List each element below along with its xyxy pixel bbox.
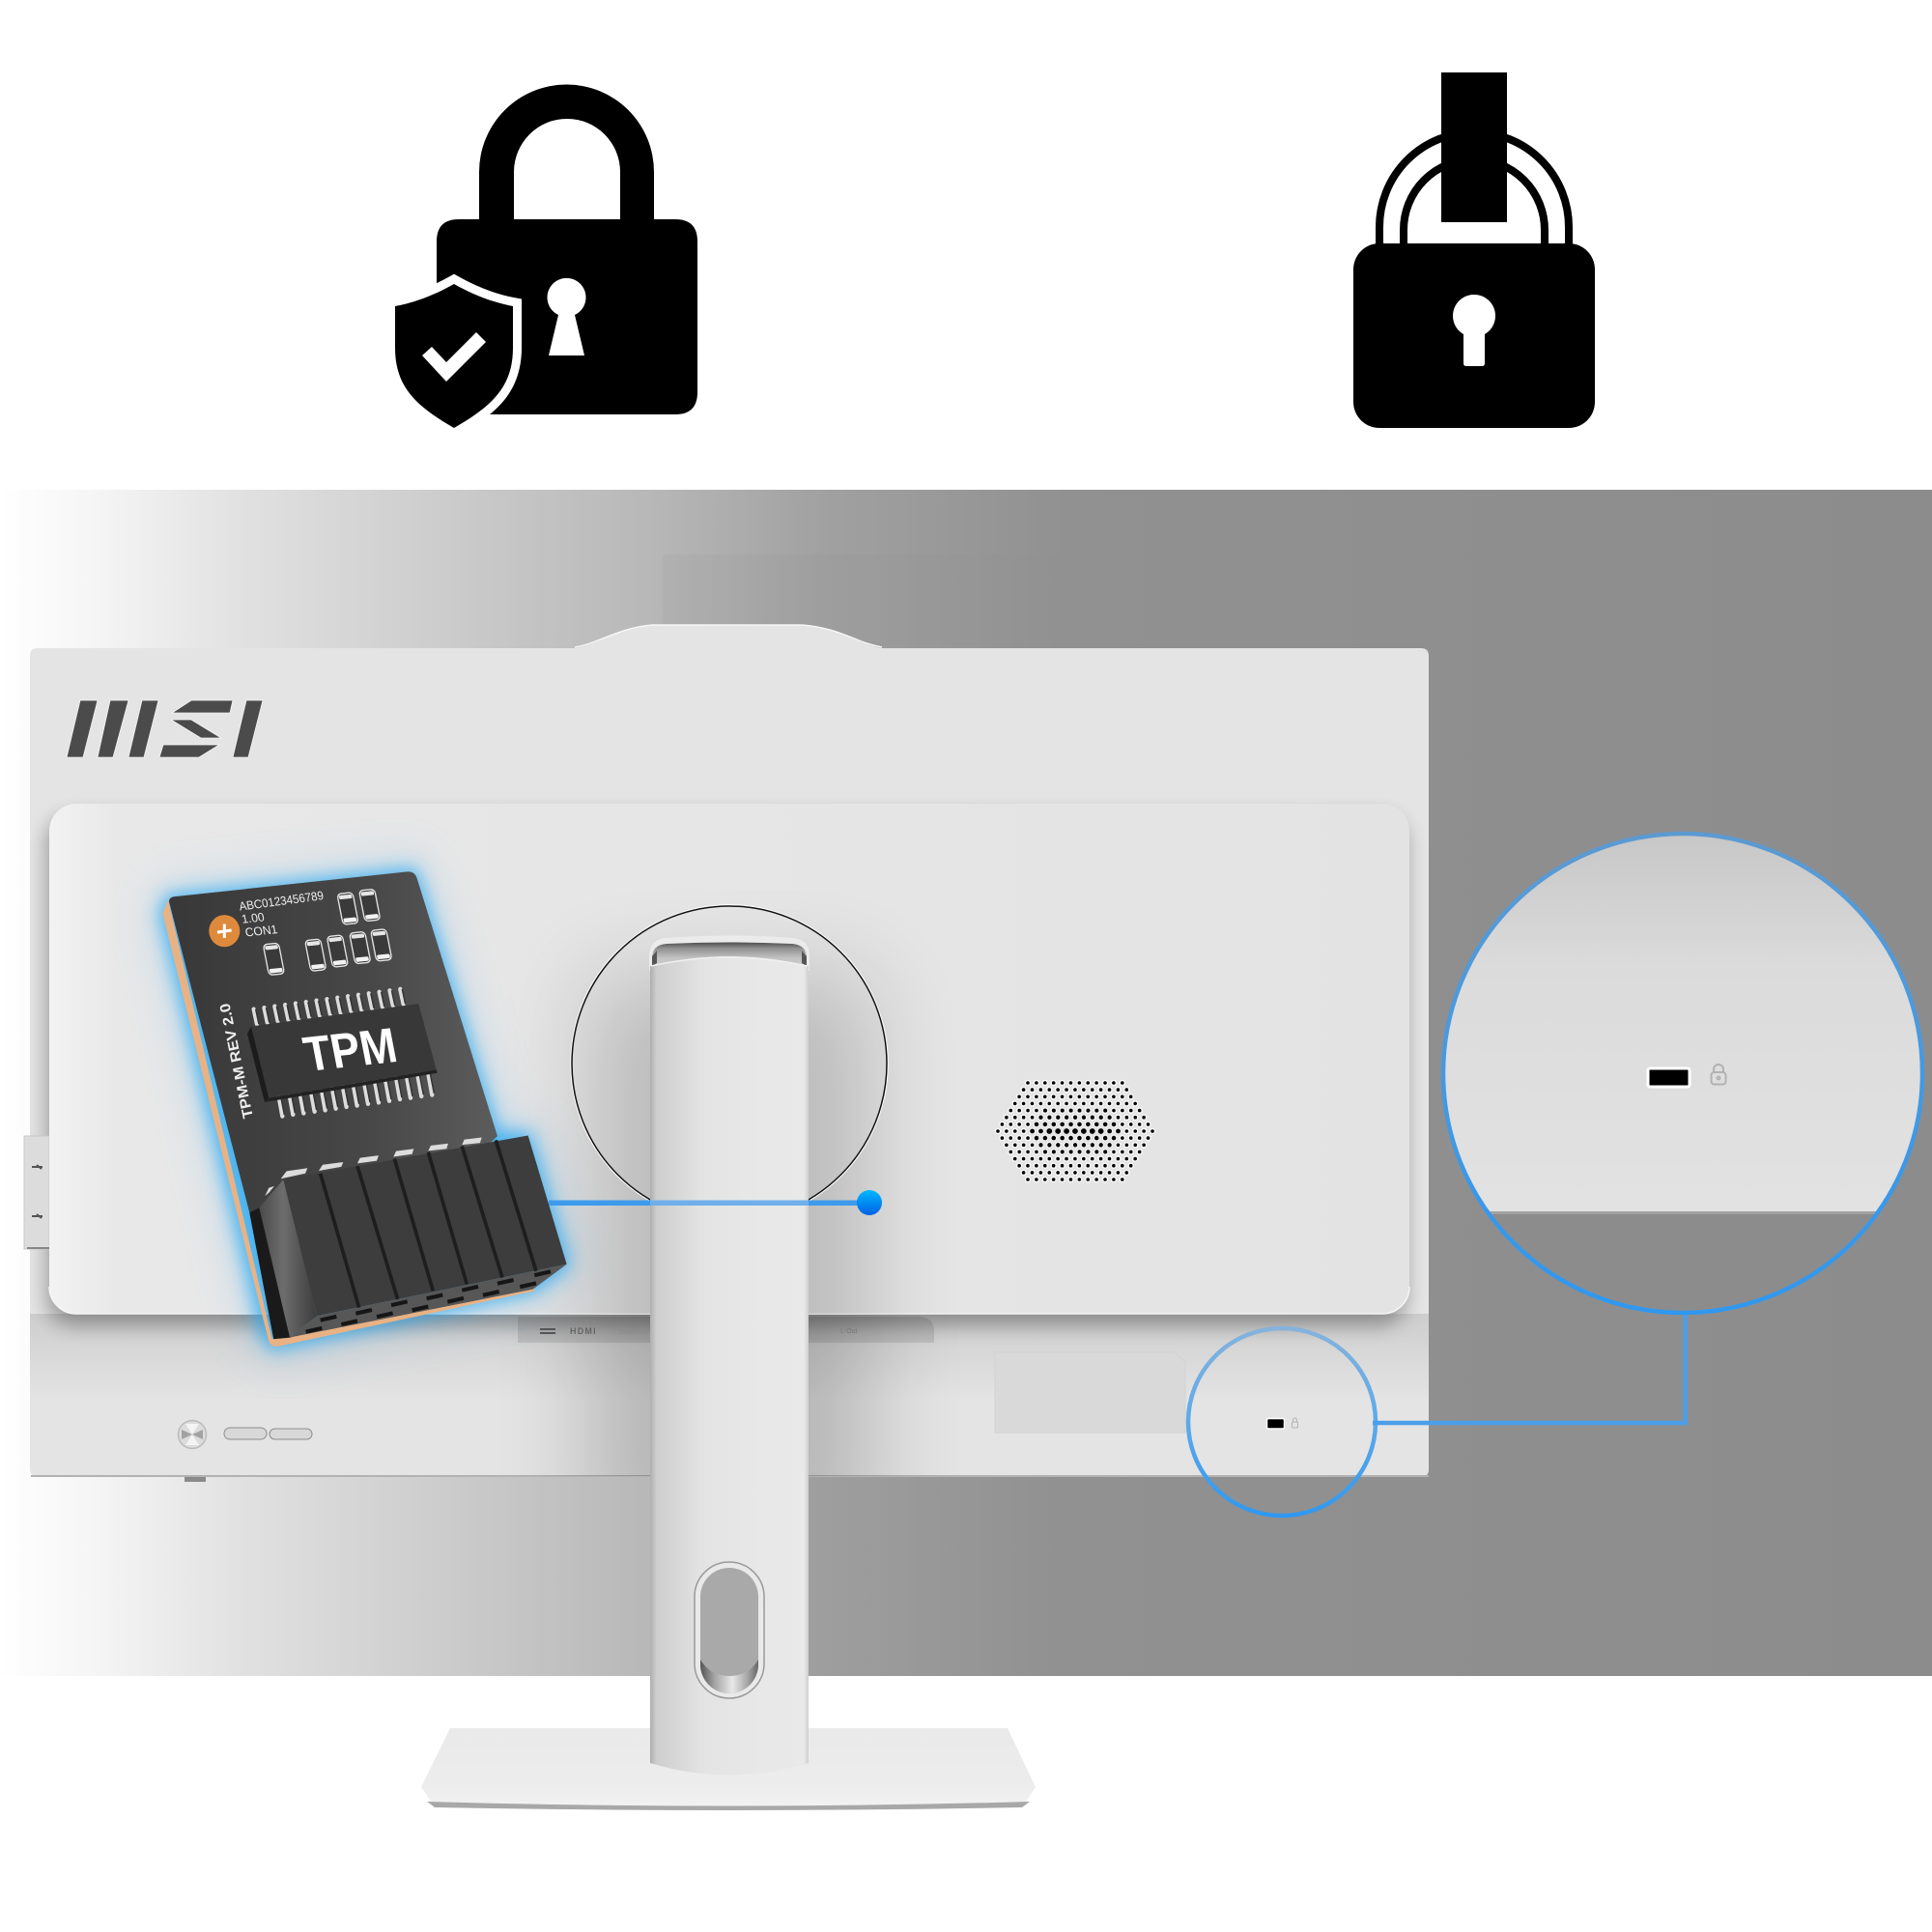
lock slot [1267,1418,1285,1429]
raised rear panel [48,804,1410,1315]
surface mount capacitors [263,889,392,975]
board print text: TPM-M REV 2.0 [217,1002,257,1120]
module copper edge [162,900,534,1347]
USB side bracket [24,1136,49,1249]
callout dot [857,1190,882,1215]
icon: padlock with cable lock bar [1353,72,1595,428]
port label strip: HDMI [570,1326,597,1336]
monitor back shell [30,625,1429,1555]
power knob and buttons [178,1420,312,1482]
cover plate next to lock slot [995,1352,1185,1433]
header connector [249,1135,567,1339]
magnified lock slot [1648,1068,1690,1087]
TPM chip [247,989,438,1117]
port label strip [518,1317,934,1343]
cable management hole [695,1562,764,1698]
connector line between callout circles [1373,1312,1685,1423]
port label strip: L-Out [840,1328,858,1335]
gradient backdrop band [0,490,1932,1676]
speaker grille [998,1083,1153,1179]
MSI logo [67,700,263,757]
monitor stand column [649,935,810,1776]
callout line from TPM to dot [549,1200,869,1206]
TPM module [162,871,567,1347]
port label strip: DISPLAY P [619,1330,648,1336]
board print text [217,889,325,1120]
TPM chip: TPM [299,1018,401,1082]
board print text: ABC0123456789 [238,889,325,914]
board print text: 1.00 [241,910,266,926]
big magnified circle of lock slot [1439,831,1932,1321]
thin circle marking TPM location [571,905,888,1222]
small callout circle around lock slot [1188,1328,1376,1516]
tiny lock mark [1293,1418,1298,1428]
stand base plate [421,1719,1036,1810]
icon: padlock with security shield [395,85,697,428]
board print text: CON1 [244,923,279,940]
circuit board [169,871,497,1339]
board corner mark [209,915,240,947]
magnified lock mark [1712,1065,1725,1084]
blue glow behind TPM module [162,871,567,1347]
